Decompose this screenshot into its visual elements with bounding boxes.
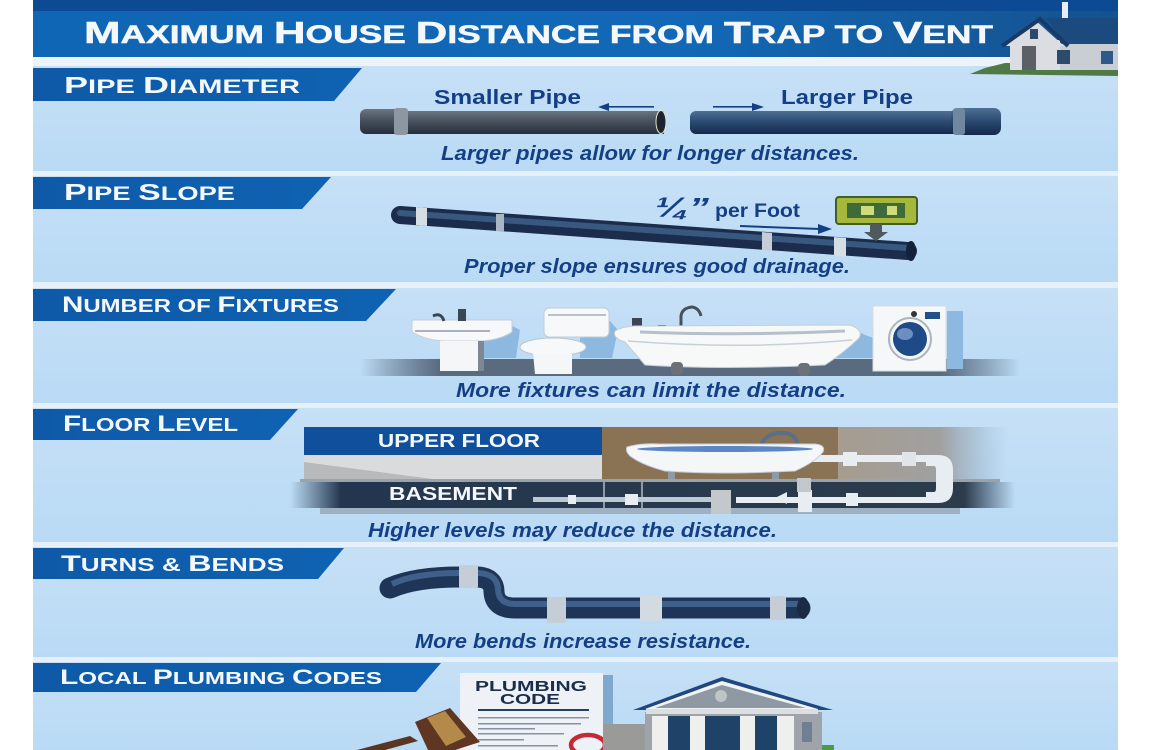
title banner [33,0,1118,66]
panel: local plumbing codes [33,662,1118,750]
heading tag: pipe diameter [33,68,362,101]
pipe: smaller [360,108,666,135]
drain pipes [533,452,953,514]
icon: slope level gauge [836,197,917,241]
heading tag: floor level [33,409,298,440]
icon: sink [412,309,520,371]
panel: pipe diameter [33,66,1118,176]
arrow: smaller pipe [598,103,654,111]
floor shadow [360,359,1020,376]
heading tag: floor level: F LOOR L EVEL [63,411,238,436]
bent pipe [390,565,809,623]
panel: number of fixtures [33,288,1118,408]
label: larger pipe: Larger Pipe [781,87,913,109]
label: 1/4 inch per foot: ¼” [655,192,709,223]
sloped pipe [400,207,916,261]
arrow: larger pipe [713,103,764,111]
heading tag: number of fixtures: N UMBER OF FIXTURES [62,292,339,317]
icon: toilet [520,308,618,374]
icon: house [970,2,1118,76]
label: basement: BASEMENT [389,484,517,504]
heading tag: turns and bends: T URNS & B ENDS [61,551,284,576]
icon: plumbing code document: PLUMBING [475,678,587,695]
heading tag: pipe diameter: P IPE D IAMETER [64,72,300,98]
heading tag: pipe slope [33,177,331,209]
icon: bathtub [614,307,878,376]
icon: plumbing code document [460,673,613,750]
label box: upper floor: UPPER FLOOR [378,431,540,451]
heading tag: number of fixtures [33,289,396,321]
panel: floor level [33,408,1118,547]
panel: turns and bends [33,547,1118,662]
heading tag: local plumbing codes: L OCAL P LUMBING C ODES [60,664,382,689]
icon: bathtub upper floor [626,433,824,479]
title: M AXIMUM H OUSE D ISTANCE FROM T RAP TO V ENT [84,15,993,50]
heading tag: pipe slope: P IPE S LOPE [64,179,235,205]
caption: floor level: Higher levels may reduce the distance. [368,520,777,542]
icon: government building [603,677,834,750]
icon: gavel [357,708,480,750]
label: 1/4 inch per foot: per Foot [715,201,801,222]
icon: washing machine [873,306,963,371]
caption: turns and bends: More bends increase resistance. [415,631,751,653]
building cross-section [290,427,1015,514]
label box: upper floor [304,427,602,455]
caption: pipe diameter: Larger pipes allow for longer distances. [441,143,859,165]
label: smaller pipe: Smaller Pipe [434,87,581,109]
caption: pipe slope: Proper slope ensures good drainage. [464,256,850,278]
caption: number of fixtures: More fixtures can limit the distance. [456,380,846,402]
heading tag: local plumbing codes [33,663,441,692]
panel: pipe slope [33,176,1118,288]
icon: plumbing code document: CODE [500,691,560,708]
arrow: slope direction [740,224,832,234]
heading tag: turns and bends [33,548,344,579]
icon: red check seal [571,735,636,750]
pipe: larger [690,108,1001,135]
